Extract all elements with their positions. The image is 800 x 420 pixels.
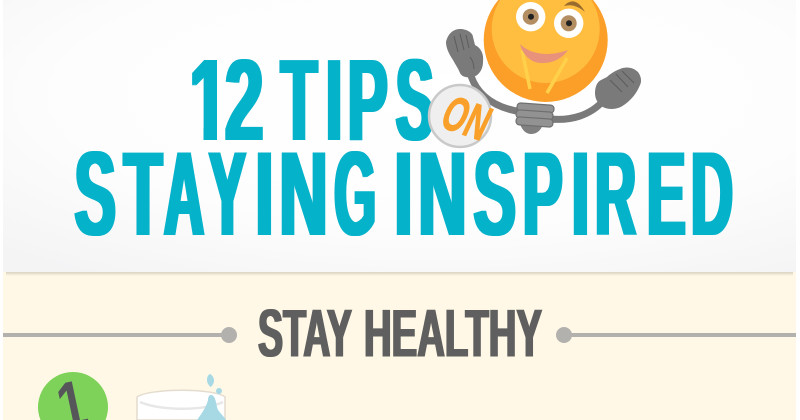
brow <box>564 1 585 12</box>
water splash <box>197 395 226 420</box>
title: 12 TIPS: T <box>281 34 317 165</box>
title: STAYING INSPIRED: T <box>124 127 162 261</box>
left arm <box>471 76 522 112</box>
title: 12 TIPS: I <box>326 36 342 165</box>
title: 12 TIPS: 1 <box>189 36 228 165</box>
title: STAYING INSPIRED: Y <box>209 126 246 261</box>
title: STAYING INSPIRED: P <box>523 127 563 262</box>
title: STAYING INSPIRED: D <box>691 127 733 260</box>
bulb screw base <box>516 103 554 127</box>
bulb glass <box>484 0 608 102</box>
title: 12 TIPS: S <box>396 36 434 165</box>
badge: ON: ON <box>433 86 500 151</box>
heading rule right <box>556 327 796 343</box>
title: 12 TIPS <box>192 58 432 141</box>
smile <box>520 44 568 63</box>
right hand <box>595 68 641 109</box>
section heading: STAY HEALTHY: HEALTHY <box>364 296 542 372</box>
icon: light bulb mascot <box>446 0 641 134</box>
header shadow <box>6 272 793 276</box>
section heading: STAY HEALTHY: STAY <box>258 296 352 372</box>
title: STAYING INSPIRED <box>74 126 733 262</box>
title: STAYING INSPIRED: R <box>595 126 636 261</box>
icon: glass of water <box>137 374 226 420</box>
title: STAYING INSPIRED: A <box>164 126 204 261</box>
title: STAYING INSPIRED: I <box>394 128 412 261</box>
heading rule left <box>3 327 237 343</box>
title: STAYING INSPIRED: S <box>74 128 116 261</box>
eyes <box>516 2 545 31</box>
title: STAYING INSPIRED: I <box>572 128 589 261</box>
title: STAYING INSPIRED: N <box>279 126 328 261</box>
section heading: STAY HEALTHY <box>258 296 542 372</box>
bulb base cap <box>520 124 543 134</box>
right arm <box>550 100 604 119</box>
panel: title header <box>3 0 796 272</box>
title: 12 TIPS: 2 <box>225 36 264 165</box>
left hand <box>446 29 483 77</box>
title: STAYING INSPIRED: N <box>418 126 467 261</box>
title: 12 TIPS: P <box>348 34 388 165</box>
title: STAYING INSPIRED: S <box>474 128 516 261</box>
number badge: 1 <box>38 365 108 420</box>
title: STAYING INSPIRED: G <box>334 127 376 261</box>
title: STAYING INSPIRED: E <box>647 127 686 260</box>
filament <box>522 50 567 93</box>
title: STAYING INSPIRED: I <box>256 128 273 261</box>
panel: cream section background <box>3 272 796 420</box>
